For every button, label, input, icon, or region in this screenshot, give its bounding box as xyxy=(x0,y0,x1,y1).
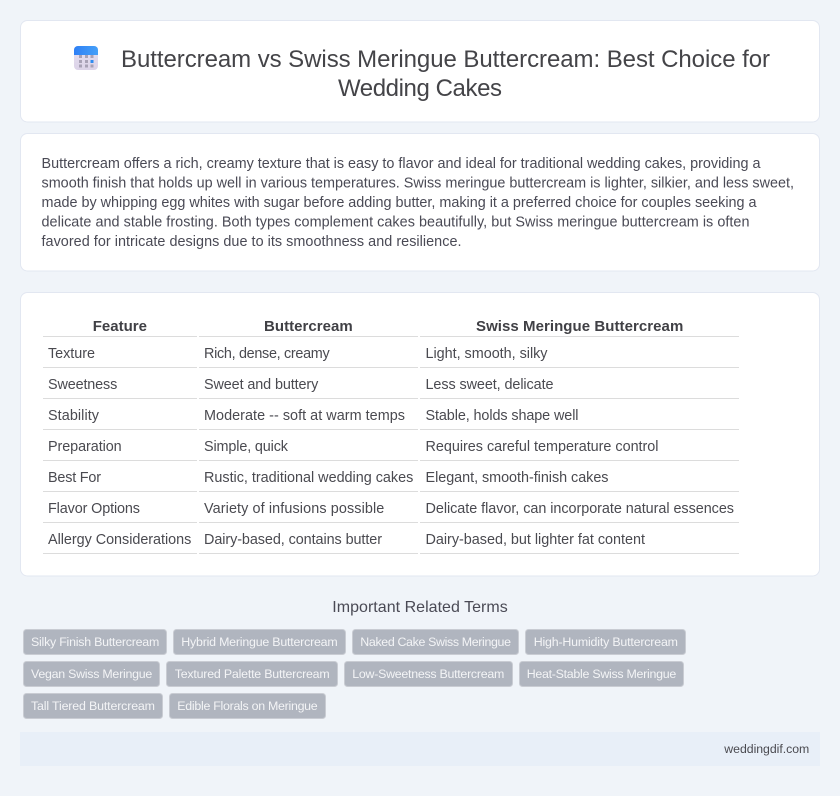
row: stability: Moderate -- soft at warm temps xyxy=(204,408,405,424)
row: allergy considerations: Dairy-based, contains butter xyxy=(204,532,382,548)
row: texture: Texture xyxy=(48,346,95,362)
tag row 2 xyxy=(24,662,684,686)
title xyxy=(121,46,770,102)
intro paragraph: smooth finish that holds up well in various temperatures. Swiss meringue buttercream is lighter, silkier, and less sweet, xyxy=(42,176,794,192)
tag row 2: Heat-Stable Swiss Meringue xyxy=(527,667,676,681)
tag row 1: High-Humidity Buttercream xyxy=(534,635,678,649)
row: allergy considerations: Allergy Considerations xyxy=(48,532,191,548)
footer source text: weddingdif.com xyxy=(723,742,809,756)
row: sweetness: Sweetness xyxy=(48,377,117,393)
title: Buttercream vs Swiss Meringue Buttercream: Best Choice for xyxy=(121,46,770,73)
row: best for: Elegant, smooth-finish cakes xyxy=(426,470,608,486)
table header row: Buttercream xyxy=(264,318,353,335)
intro paragraph: Buttercream offers a rich, creamy texture that is easy to flavor and ideal for traditional wedding cakes, providing a xyxy=(42,156,760,172)
tag row 2: Vegan Swiss Meringue xyxy=(31,667,152,681)
row: texture: Rich, dense, creamy xyxy=(204,346,330,362)
row: stability: Stability xyxy=(48,408,100,424)
tag row 2: Low-Sweetness Buttercream xyxy=(352,667,504,681)
table header row xyxy=(93,318,683,335)
tag row 3: Tall Tiered Buttercream xyxy=(31,699,155,713)
row: sweetness xyxy=(48,377,554,393)
tag row 1: Silky Finish Buttercream xyxy=(31,635,159,649)
row: texture xyxy=(48,346,548,362)
row: flavor options xyxy=(48,501,734,517)
row: preparation: Preparation xyxy=(48,439,122,455)
row: best for xyxy=(48,470,608,486)
row: stability: Stable, holds shape well xyxy=(426,408,578,424)
tag row 3: Edible Florals on Meringue xyxy=(177,699,318,713)
intro paragraph xyxy=(42,156,794,250)
tag row 1: Hybrid Meringue Buttercream xyxy=(181,635,338,649)
row: stability xyxy=(48,408,578,424)
table header row: Swiss Meringue Buttercream xyxy=(476,318,683,335)
intro paragraph: favored for intricate designs due to its smoothness and resilience. xyxy=(42,234,462,250)
panel: intro text xyxy=(20,134,820,271)
row: preparation: Simple, quick xyxy=(204,439,289,455)
intro paragraph: made by whipping egg whites with sugar before adding butter, making it a preferred choice for couples seeking a xyxy=(42,195,756,211)
intro paragraph: delicate and stable frosting. Both types complement cakes beautifully, but Swiss meringue buttercream is often xyxy=(42,214,750,230)
footer xyxy=(20,732,820,766)
tag row 3 xyxy=(24,694,326,718)
table row lines xyxy=(43,336,739,554)
tag row 1 xyxy=(24,630,686,654)
row: best for: Rustic, traditional wedding cakes xyxy=(204,470,413,486)
tag row 1: Naked Cake Swiss Meringue xyxy=(360,635,511,649)
row: flavor options: Flavor Options xyxy=(48,501,140,517)
row: flavor options: Delicate flavor, can incorporate natural essences xyxy=(426,501,734,517)
row: preparation: Requires careful temperature control xyxy=(426,439,658,455)
row: best for: Best For xyxy=(48,470,101,486)
icon: calendar xyxy=(74,46,98,70)
heading: important related terms: Important Related Terms xyxy=(332,599,508,616)
title: Wedding Cakes xyxy=(338,75,502,102)
table header row: Feature xyxy=(93,318,147,335)
row: flavor options: Variety of infusions possible xyxy=(204,501,384,517)
tag row 2: Textured Palette Buttercream xyxy=(175,667,330,681)
row: sweetness: Sweet and buttery xyxy=(204,377,319,393)
panel: comparison table xyxy=(20,292,820,576)
header panel xyxy=(20,20,820,122)
tags: related terms xyxy=(24,630,686,718)
row: allergy considerations xyxy=(48,532,645,548)
row: preparation xyxy=(48,439,658,455)
row: sweetness: Less sweet, delicate xyxy=(426,377,554,393)
row: allergy considerations: Dairy-based, but lighter fat content xyxy=(426,532,645,548)
row: texture: Light, smooth, silky xyxy=(426,346,548,362)
